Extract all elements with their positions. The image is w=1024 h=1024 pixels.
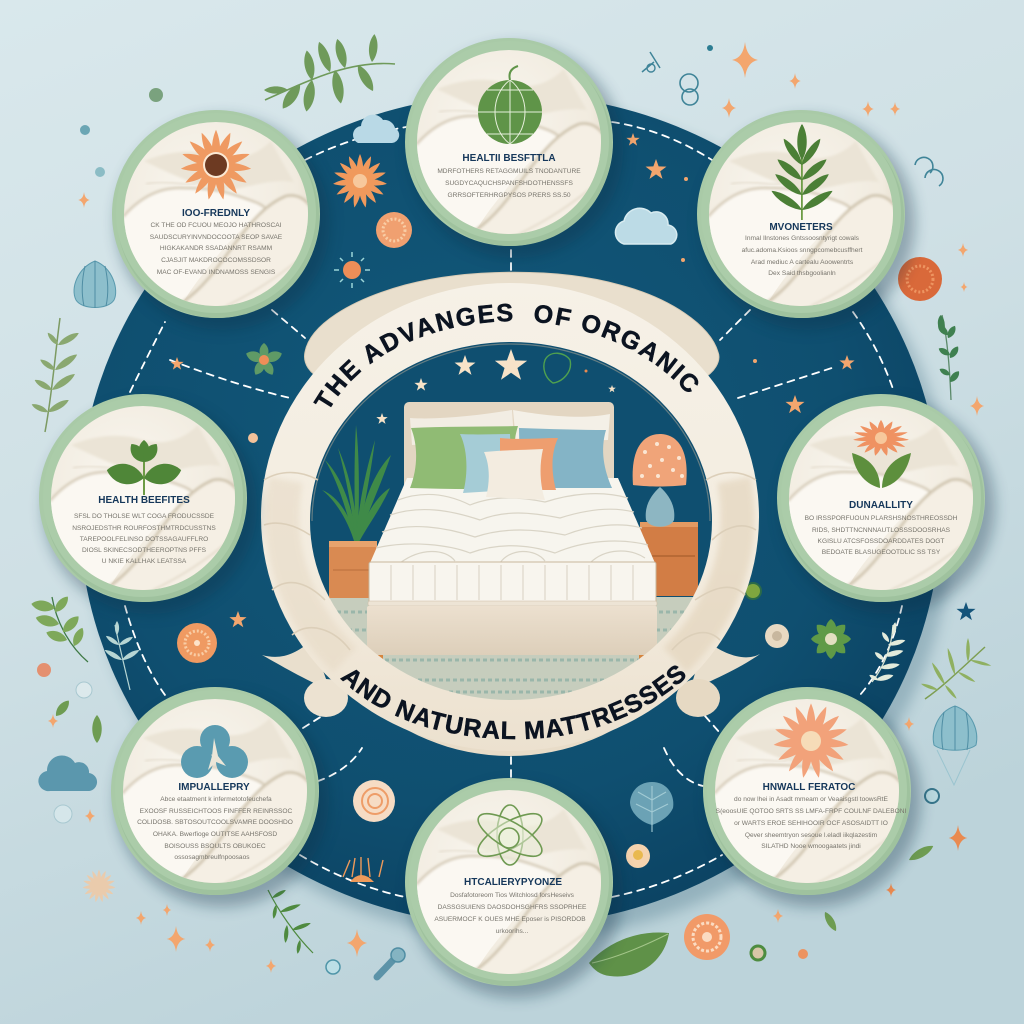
panel: hypoallergenic bottom: ASUERMOCF K OUES MHE Eposer is PISORDOB [434,916,586,923]
rug [330,597,693,700]
panel: hypoallergenic: COLIDOSB. SBTOSOUTCOOLSVAMRE DOOSHDO [137,819,293,826]
right nightstand and lamp [633,434,698,596]
icon: pale fern on disc [103,621,141,690]
panel: antibacterial: do now lhei in Asadt mmeam or Veaaisgstl toowsRtE [734,796,889,803]
title text [313,304,698,740]
shadow of central disc [88,104,952,940]
panel: health benefits top: HEALTII BESFTTLA [462,153,556,164]
panel: eco-friendly: HIGKAKANDR SSADANNRT RSAMM [160,245,272,252]
plant and left nightstand [322,425,391,598]
panel: durability: DUNAALLITY [849,500,913,511]
icon: balloon lanterns [74,261,977,785]
panel: eco-friendly [112,110,330,330]
icon: green seedling [105,440,183,495]
panel: durability: KGISLU ATCSFOSSDOARDDATES DOGT [818,538,944,545]
panel: hypoallergenic bottom: DASSGSUIENS DAOSDOHSGHFRS SSOPRHEE [438,904,587,911]
panel: mvoneters: MVONETERS [769,222,833,233]
pillows [410,410,612,500]
panel: health benefits left: DIOSL SKINECSODTHEEROPTNS PFFS [82,547,207,554]
panel: health benefits left: U NKIE KALLHAK LEATSSA [102,558,187,565]
panel: hypoallergenic: IMPUALLEPRY [178,782,250,793]
panel: hypoallergenic bottom: urkoorihs... [496,928,528,935]
icon: bottom sprig [268,888,313,954]
icon: right white fern on disc [868,622,906,683]
mattress [368,478,657,606]
panel: health benefits left: HEALTH BEEFITES [98,495,190,506]
central ring back cushions [262,272,760,756]
panel: health benefits left: NSROJEDSTHR ROURFOSTHMTRDCUSSTNS [72,525,216,532]
panel: mvoneters: Inmal Ilnstones Gntssoosntyrigt cowals [745,235,860,242]
icon: blue trefoil [181,725,248,778]
bed base [367,606,657,660]
panel: hypoallergenic: ossosagmbreulfnpoosaos [174,854,250,861]
panel: hypoallergenic: Abce etaatment k infermetotofeuchefa [160,796,272,803]
panel: mvoneters: afuc.adoma.Ksioos snngpcomebcusffhert [742,247,863,254]
dashed connector lines [125,122,902,897]
panel: hypoallergenic [111,687,329,907]
icon: small plant flower on disc [244,343,284,377]
panel: durability [777,394,995,614]
icon: top-left leaf branch [264,34,395,112]
panel: durability: RIDS, SHDTTNCNNNAUTLOSSSDOOSRHAS [812,527,951,534]
panel: antibacterial: or WARTS EROE SEHIHOOIR OCF ASOSAIDTT IO [734,820,888,827]
panel: health benefits left: SFSL DO THOLSE WLT COGA FRODUCSSDE [74,513,215,520]
panel: antibacterial: S(eoosUIE QOTOO SRTS SS LMFA-FRPF COULNF DALEBONI [716,808,906,815]
panel: mvoneters [697,110,915,330]
icon: green atom flower [472,805,548,865]
panel: hypoallergenic bottom [405,778,623,998]
icon: peach daisy [773,703,849,779]
panel: eco-friendly: IOO-FREDNLY [182,208,250,219]
panel: eco-friendly: MAC OF-EVAND INDNAMOSS SENGIS [157,269,276,276]
panel: health benefits top: GRRSOFTERHRGPYSOS PRERS SS.50 [447,192,571,199]
heading top arc: THE ADVANGES OF ORGANIC [313,304,698,408]
panel: eco-friendly: CK THE OD FCUOU MEOJO HATHROSCAI [151,222,282,229]
panel: mvoneters: Dex Said thsbgoolianln [768,270,836,277]
panel: hypoallergenic: BOISOUSS BSOULTS OBUKOEC [164,843,266,850]
panel: health benefits top: SUGDYCAQUCHSPANFSHDOTHENSSFS [445,180,573,187]
icon: bottom large leaf [589,932,669,977]
panel: health benefits top: MDRFOTHERS RETAGGMUILS TNODANTURE [437,168,581,175]
icon: orange flower with leaves [852,420,911,488]
icon: disc ornaments [54,45,943,977]
panel: mvoneters: Arad mediuc A cartealu Aoowentrts [751,259,854,266]
title ring [261,283,759,751]
panel: antibacterial: SILATHD Nooe wmoogaatets jindi [761,843,861,850]
panel: health benefits left [39,394,257,614]
panel: antibacterial [703,687,921,907]
icon: right palm frond [921,638,992,700]
panel: durability: BEDOATE BLASUGEOOTDLIC SS TSY [822,549,941,556]
panel: hypoallergenic: OHAKA. Bwerfioge OUTITSE AAHSFOSD [153,831,277,838]
icon: green globe [478,66,542,144]
icon: left round-leaf branch [30,594,88,662]
central dark blue disc [79,94,941,926]
icon: small leaves [53,698,935,933]
panel: hypoallergenic bottom: HTCALIERYPYONZE [464,877,562,888]
icon: green flower on disc [811,619,851,659]
panel: antibacterial: HNWALL FERATOC [763,782,855,793]
panel: antibacterial: Qever sheemtryon sesoue l.eladl iikqlazestim [745,832,878,839]
panel: durability: BO IRSSPORFUOUN PLARSHSNOSTHREOSSDH [805,515,958,522]
icon: clouds [38,115,677,791]
panel: hypoallergenic: EXOOSF RUSSEICHTOOS FINFFER REINRSSOC [140,808,293,815]
icon: orange flowers [37,154,942,960]
panel: eco-friendly: SAUDSCURYINVNDOCOOTA SEOP SAVAE [150,234,283,241]
icon: orange daisy [180,130,252,200]
center stars [376,349,616,424]
headboard [404,402,614,485]
icon: left fern [31,318,80,432]
heading bottom arc: AND NATURAL MATTRESSES [340,666,686,740]
icon: green plant [769,124,835,220]
panel: eco-friendly: CJASJIT MAKDROCOCOMSSDSOR [161,257,271,264]
panel: health benefits top [405,38,623,258]
panel: health benefits left: TAREPOOLFELINSO DOTSSAGAUFFLRO [80,536,208,543]
center scene: bed and night room [310,342,712,700]
icon: right sprig [936,315,961,400]
panel: hypoallergenic bottom: Dosfafotoreom Tios Witchlosd forsHeseivs [450,892,575,899]
